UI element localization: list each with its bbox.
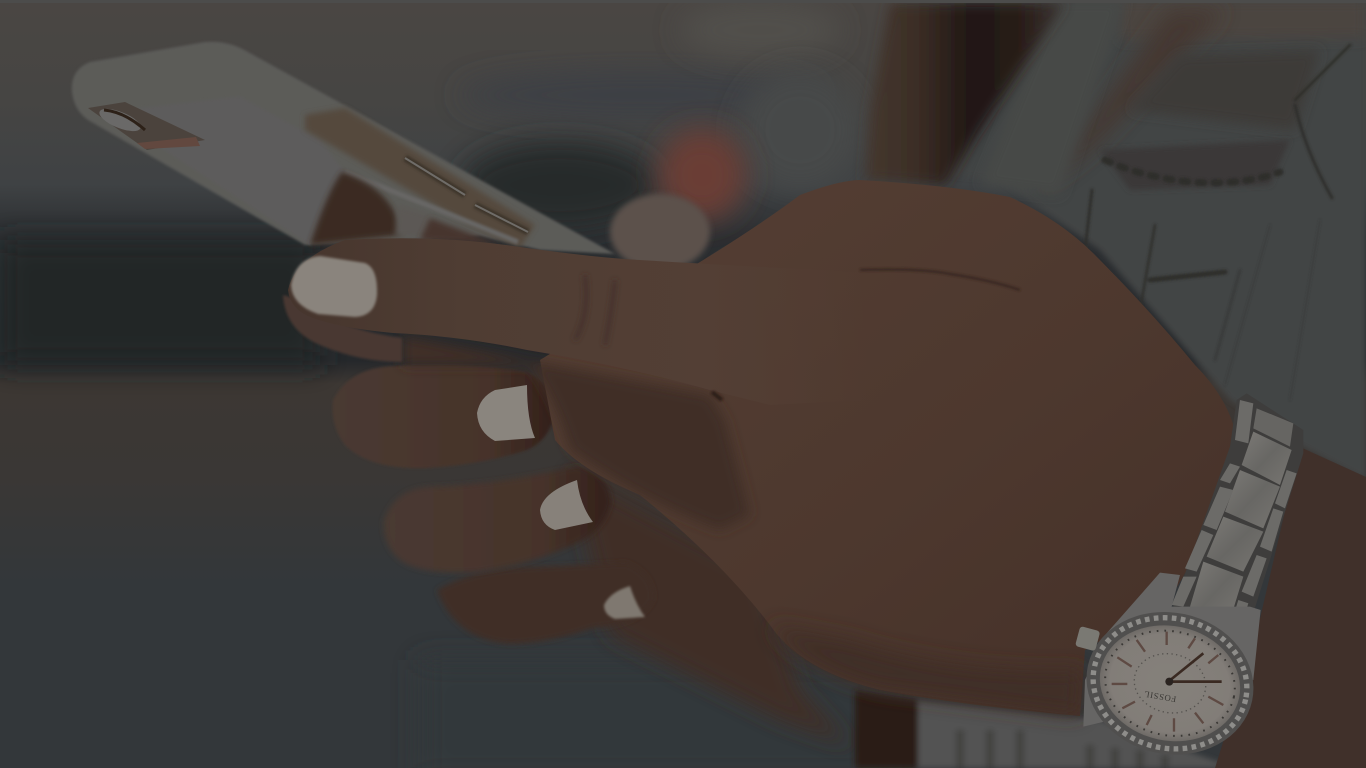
wristwatch bbox=[1073, 393, 1303, 768]
lower fingers bbox=[332, 365, 850, 745]
pale ring under fingertip bbox=[283, 295, 402, 362]
hair bbox=[865, 3, 1065, 185]
lower clothing strip bbox=[855, 690, 1235, 768]
watch bracelet bbox=[1172, 393, 1303, 632]
shadow along lower hand edge bbox=[770, 625, 1083, 716]
phone camera bbox=[88, 102, 205, 150]
watch crown bbox=[1075, 626, 1100, 651]
crease on knuckles bbox=[860, 270, 1020, 290]
palm behind the fingers bbox=[570, 470, 850, 745]
watch hands bbox=[1168, 653, 1222, 682]
forearm bbox=[1215, 447, 1366, 768]
top edge strip bbox=[0, 0, 1366, 3]
middle nail bbox=[477, 385, 535, 441]
middle finger bbox=[332, 365, 555, 468]
far hand fingertip and thumb bbox=[310, 172, 770, 270]
watch brand: FOSSIL bbox=[1143, 689, 1177, 705]
main hand bbox=[283, 180, 1235, 716]
ring nail bbox=[540, 480, 593, 530]
ring finger bbox=[384, 466, 611, 572]
index finger bbox=[288, 238, 870, 405]
phone bbox=[72, 42, 615, 254]
clothing on the right bbox=[900, 0, 1366, 480]
pinky nail bbox=[604, 586, 645, 619]
dark web under index finger bbox=[403, 336, 750, 530]
index nail bbox=[291, 256, 377, 317]
watch dial bbox=[1089, 613, 1251, 754]
fingernails bbox=[291, 256, 645, 619]
pinky finger bbox=[437, 563, 653, 644]
watch case bbox=[1083, 573, 1261, 727]
